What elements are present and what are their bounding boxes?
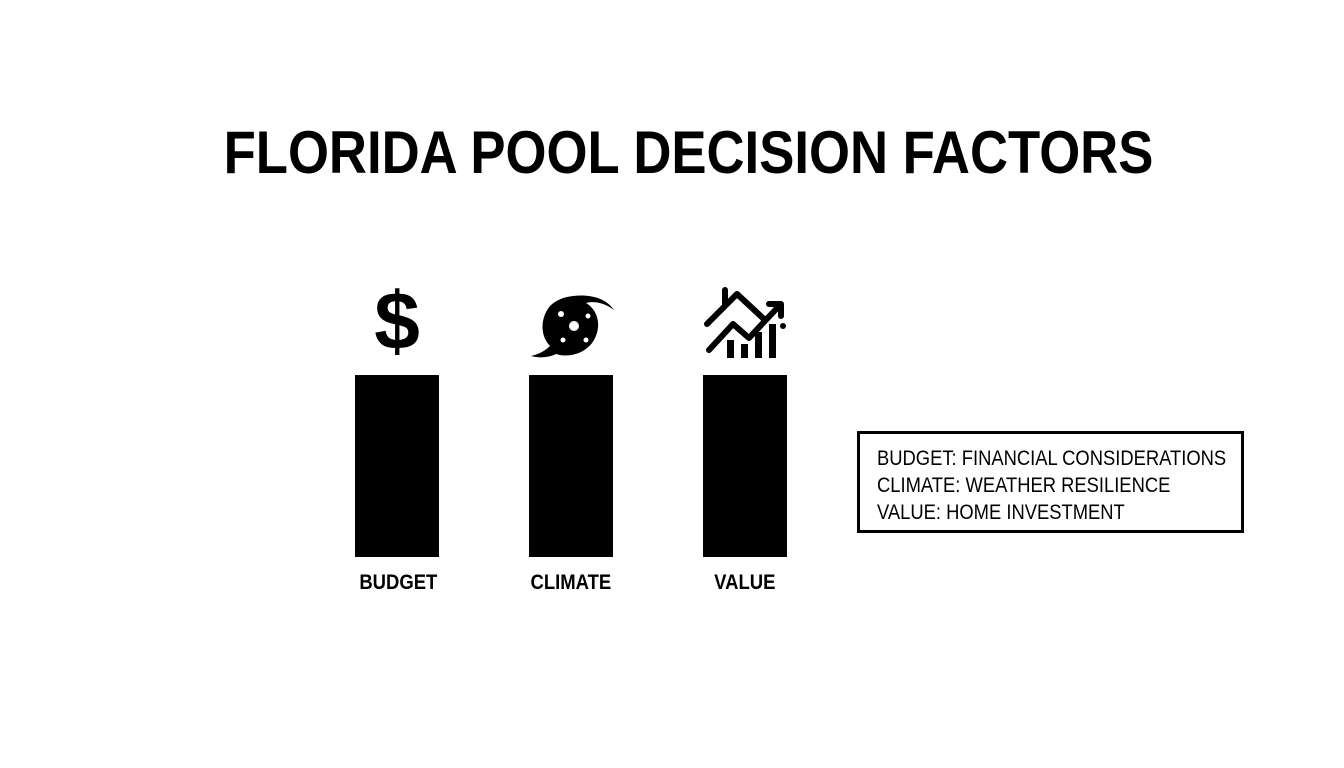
- title: FLORIDA POOL DECISION FACTORS: [223, 119, 1153, 186]
- legend box: [857, 431, 1244, 533]
- legend line: budget: BUDGET: FINANCIAL CONSIDERATIONS: [877, 447, 1226, 470]
- bar: climate: [529, 375, 613, 557]
- label: climate: CLIMATE: [531, 571, 611, 594]
- icon: dollar sign: $: [374, 276, 420, 367]
- bar: value: [703, 375, 787, 557]
- label: value: VALUE: [714, 571, 776, 594]
- label: budget: BUDGET: [359, 571, 437, 594]
- legend line: climate: CLIMATE: WEATHER RESILIENCE: [877, 474, 1170, 497]
- icon: house value chart: [704, 287, 786, 358]
- bar: budget: [355, 375, 439, 557]
- icon: hurricane: [531, 296, 614, 358]
- legend line: value: VALUE: HOME INVESTMENT: [877, 501, 1125, 524]
